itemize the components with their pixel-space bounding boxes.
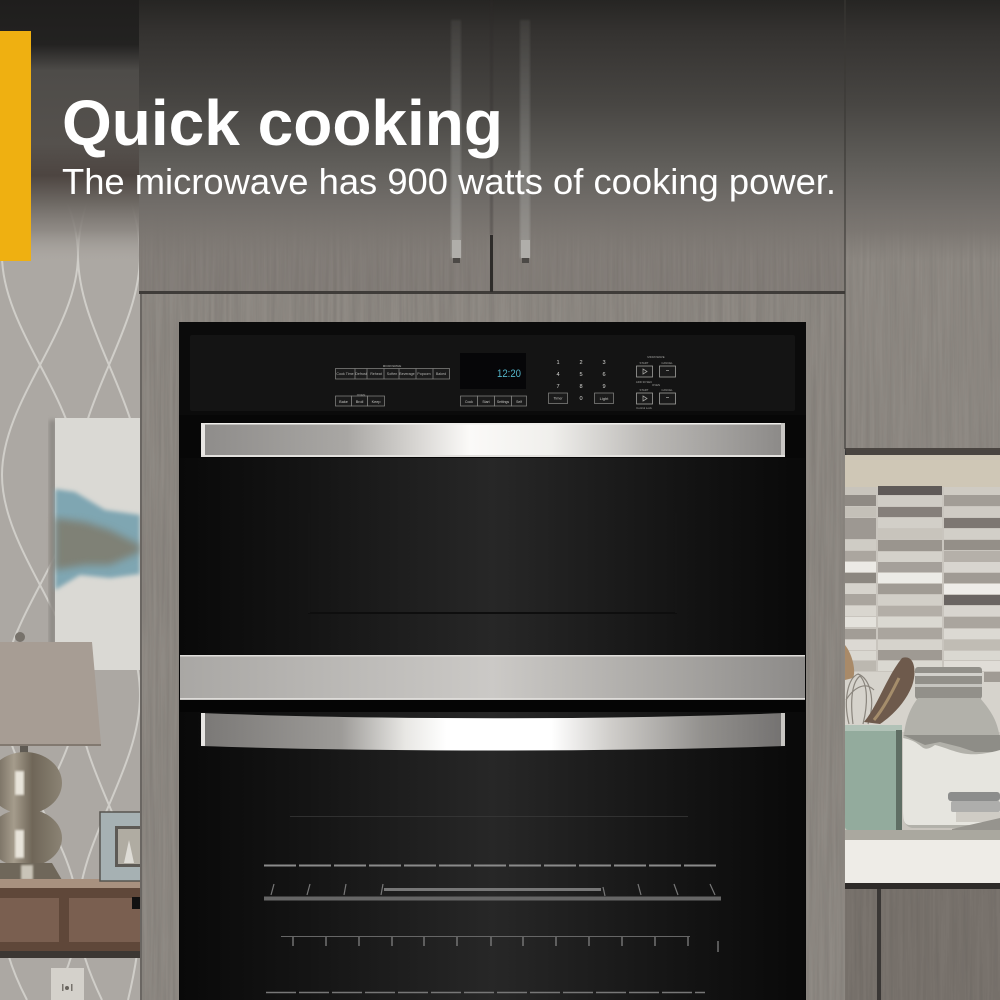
subtitle: The microwave has 900 watts of cooking power.	[62, 161, 836, 202]
start and cancel labels: START	[640, 361, 649, 365]
number keypad	[556, 360, 606, 402]
upper door handle	[201, 423, 785, 457]
microwave button labels: Cook Time	[336, 372, 354, 376]
lower door handle	[201, 713, 785, 750]
oven surround cabinet	[139, 291, 845, 1000]
cabinet handles	[451, 20, 530, 263]
start and cancel labels: Control Lock	[636, 406, 652, 410]
start and cancel labels: CANCEL	[661, 388, 673, 392]
microwave button labels	[336, 364, 446, 397]
timer labels	[465, 400, 522, 404]
glass jar with flour	[903, 667, 1000, 828]
start and cancel labels: START	[640, 388, 649, 392]
microwave button labels: Popcorn	[417, 372, 431, 376]
number keypad: 9	[602, 384, 606, 390]
oven mode labels: Broil	[356, 400, 363, 404]
timer and light buttons: Timer	[553, 396, 563, 400]
start and cancel labels: CANCEL	[661, 361, 673, 365]
yellow accent bar	[0, 31, 31, 261]
table lamp	[0, 632, 101, 880]
whisk and utensil ball	[845, 645, 874, 724]
title: Quick cooking	[62, 87, 503, 159]
upper centre cabinet doors	[139, 0, 845, 293]
microwave door	[180, 458, 805, 655]
oven mode labels: Bake	[339, 400, 348, 404]
start and cancel buttons	[636, 366, 676, 404]
oven body	[179, 322, 806, 1000]
oven mode labels	[339, 400, 380, 404]
picture frame	[100, 812, 141, 881]
number keypad: 4	[556, 372, 560, 378]
background: wallpapered wall	[0, 0, 141, 1000]
number keypad: 2	[579, 360, 583, 366]
microwave button labels: Beverage	[399, 372, 415, 376]
side table with drawers	[0, 879, 141, 958]
lower oven door	[180, 712, 805, 1000]
lower cabinets	[845, 889, 1000, 1000]
cabinet door gaps	[490, 0, 846, 449]
timer and light buttons: Light	[600, 396, 609, 401]
microwave button labels: Defrost	[355, 372, 367, 376]
timer labels: Self	[516, 400, 522, 404]
timer labels: Cook	[465, 400, 473, 404]
microwave button labels: OVEN	[357, 393, 365, 397]
oven racks	[264, 816, 721, 992]
timer labels: Start	[482, 400, 490, 404]
microwave preset buttons	[336, 368, 450, 379]
start and cancel labels: OVEN	[652, 383, 660, 387]
control panel	[179, 322, 806, 415]
start and cancel labels: ADD 30 SEC	[636, 380, 652, 384]
oven mode buttons	[336, 396, 384, 406]
start and cancel labels: MICROWAVE	[647, 355, 665, 359]
tile backsplash	[845, 486, 1000, 837]
mint canister	[845, 725, 902, 830]
number keypad: 3	[602, 360, 606, 366]
number keypad: 6	[602, 372, 606, 378]
folded cloths	[948, 792, 1000, 835]
microwave button labels: Reheat	[370, 372, 382, 376]
number keypad: 1	[556, 360, 560, 366]
number keypad: 8	[579, 384, 583, 390]
wooden spoon	[864, 657, 915, 724]
start and cancel labels	[636, 355, 673, 410]
timer labels: Settings	[497, 400, 509, 404]
top blurred gradient overlay	[139, 0, 1000, 262]
right upper cabinet	[845, 0, 1000, 449]
clock display	[460, 353, 526, 389]
under-cabinet ledge	[845, 448, 1000, 487]
microwave button labels: Soften	[387, 372, 397, 376]
oven mode labels: Keep	[372, 400, 380, 404]
microwave button labels: Baked	[436, 372, 446, 376]
number keypad: 5	[579, 372, 583, 378]
timer buttons	[460, 396, 526, 406]
number keypad: 0	[579, 396, 583, 402]
centre stainless trim	[180, 655, 805, 712]
painting	[49, 418, 140, 670]
timer and light buttons	[548, 393, 614, 404]
number keypad: 7	[556, 384, 560, 390]
clock display: 12:20	[497, 368, 521, 380]
countertop	[845, 830, 1000, 889]
upper left blurred cabinet	[0, 0, 139, 262]
microwave button labels: MICROWAVE	[383, 364, 401, 368]
wall outlet	[51, 968, 84, 1000]
